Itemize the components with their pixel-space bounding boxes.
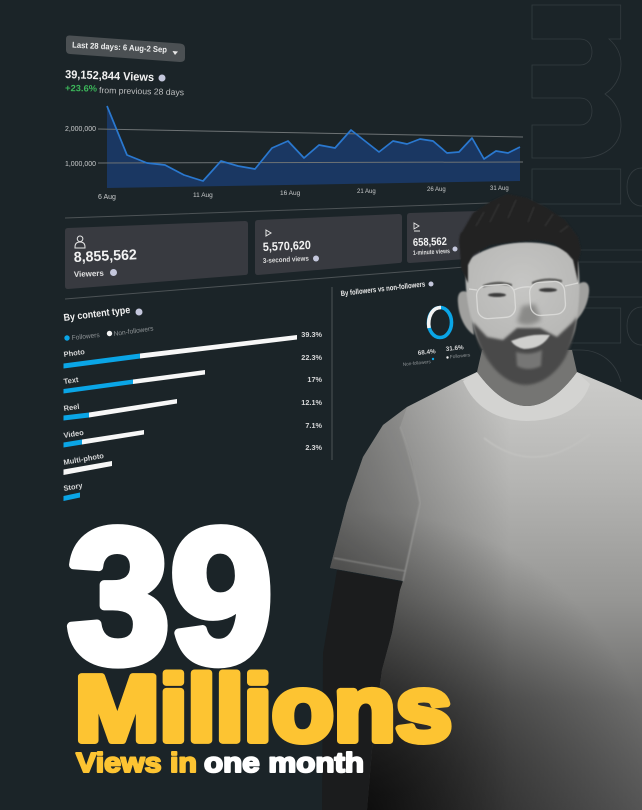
ears xyxy=(458,282,589,335)
line chart: daily views: 11 Aug xyxy=(193,192,213,199)
eyes and brows xyxy=(483,278,562,297)
line chart: daily views: 1,000,000 xyxy=(65,159,96,168)
total views headline: +23.6% xyxy=(65,83,97,94)
subheading: Views in one month xyxy=(76,747,364,778)
total views headline: 39,152,844 Views xyxy=(65,69,154,84)
stat card: 3-second views: 5,570,620 xyxy=(263,238,311,254)
donut labels xyxy=(403,344,471,368)
panel heading: By followers vs non-followers xyxy=(340,279,426,298)
stat card: 1-minute views: 1-minute views xyxy=(413,248,450,257)
bar chart: Text xyxy=(63,375,79,386)
legend xyxy=(64,325,154,342)
background outline lettering xyxy=(532,5,642,382)
line chart: daily views xyxy=(65,106,523,201)
percent values: 2.3% xyxy=(305,443,323,452)
donut labels: Followers xyxy=(450,352,471,360)
date range chip xyxy=(66,35,185,62)
percent values: 39.3% xyxy=(301,330,322,339)
stat card: 3-second views xyxy=(255,214,402,275)
glasses xyxy=(469,281,578,319)
panel heading: By content type xyxy=(63,305,131,324)
face xyxy=(465,242,579,384)
bar chart: Reel xyxy=(63,402,80,413)
sleeve shading xyxy=(330,407,420,581)
stat card: viewers: 8,855,562 xyxy=(73,247,137,266)
line chart: daily views: 16 Aug xyxy=(280,190,301,197)
panel: by followers vs non-followers xyxy=(340,279,471,368)
legend: Followers xyxy=(71,332,101,342)
line chart: daily views: 31 Aug xyxy=(490,186,509,192)
t-shirt xyxy=(330,372,642,810)
neck xyxy=(477,350,577,406)
total views headline: from previous 28 days xyxy=(99,85,184,97)
line chart: daily views: 6 Aug xyxy=(98,194,116,201)
stat card: 3-second views: 3-second views xyxy=(263,256,309,265)
photo: man in t-shirt xyxy=(322,194,642,810)
legend: Non-followers xyxy=(113,325,154,338)
dashboard screenshot xyxy=(63,35,523,501)
date range chip: Last 28 days: 6 Aug-2 Sep xyxy=(72,40,167,54)
line chart: daily views: 21 Aug xyxy=(357,189,376,195)
donut chart xyxy=(428,308,452,338)
donut labels: 31.6% xyxy=(445,344,464,353)
total views headline xyxy=(65,69,184,97)
heading: Millions: Millions xyxy=(75,656,452,760)
bar chart: Video xyxy=(63,428,85,440)
panel divider xyxy=(331,287,333,460)
donut labels: Non-followers xyxy=(403,359,432,368)
bar chart: Photo xyxy=(63,347,86,359)
big number: 39: 39 xyxy=(67,490,273,703)
stat card: 1-minute views: 658,562 xyxy=(413,236,447,249)
donut labels: 68.4% xyxy=(417,348,436,357)
stat card: viewers xyxy=(65,221,248,289)
percent values: 7.1% xyxy=(305,421,323,430)
percent values xyxy=(301,330,323,452)
percent values: 22.3% xyxy=(301,353,322,362)
percent values: 17% xyxy=(307,375,323,384)
stat card: 1-minute views xyxy=(407,211,480,263)
arm in shadow xyxy=(322,570,404,810)
stat card: viewers: Viewers xyxy=(74,269,105,279)
nose xyxy=(517,304,541,325)
line chart: daily views: 2,000,000 xyxy=(65,124,96,133)
section dividers xyxy=(65,203,490,299)
subheading: Views in one month: one month xyxy=(204,747,364,778)
subheading: Views in one month: Views in xyxy=(76,747,197,778)
hair xyxy=(459,194,581,283)
percent values: 12.1% xyxy=(301,398,322,407)
collar xyxy=(463,372,590,421)
bar chart: Story xyxy=(63,481,84,493)
line chart: daily views: 26 Aug xyxy=(427,187,446,193)
panel: by content type xyxy=(63,305,323,501)
beard xyxy=(473,317,577,385)
bar chart: Multi-photo xyxy=(63,451,105,467)
bar chart xyxy=(63,335,297,501)
